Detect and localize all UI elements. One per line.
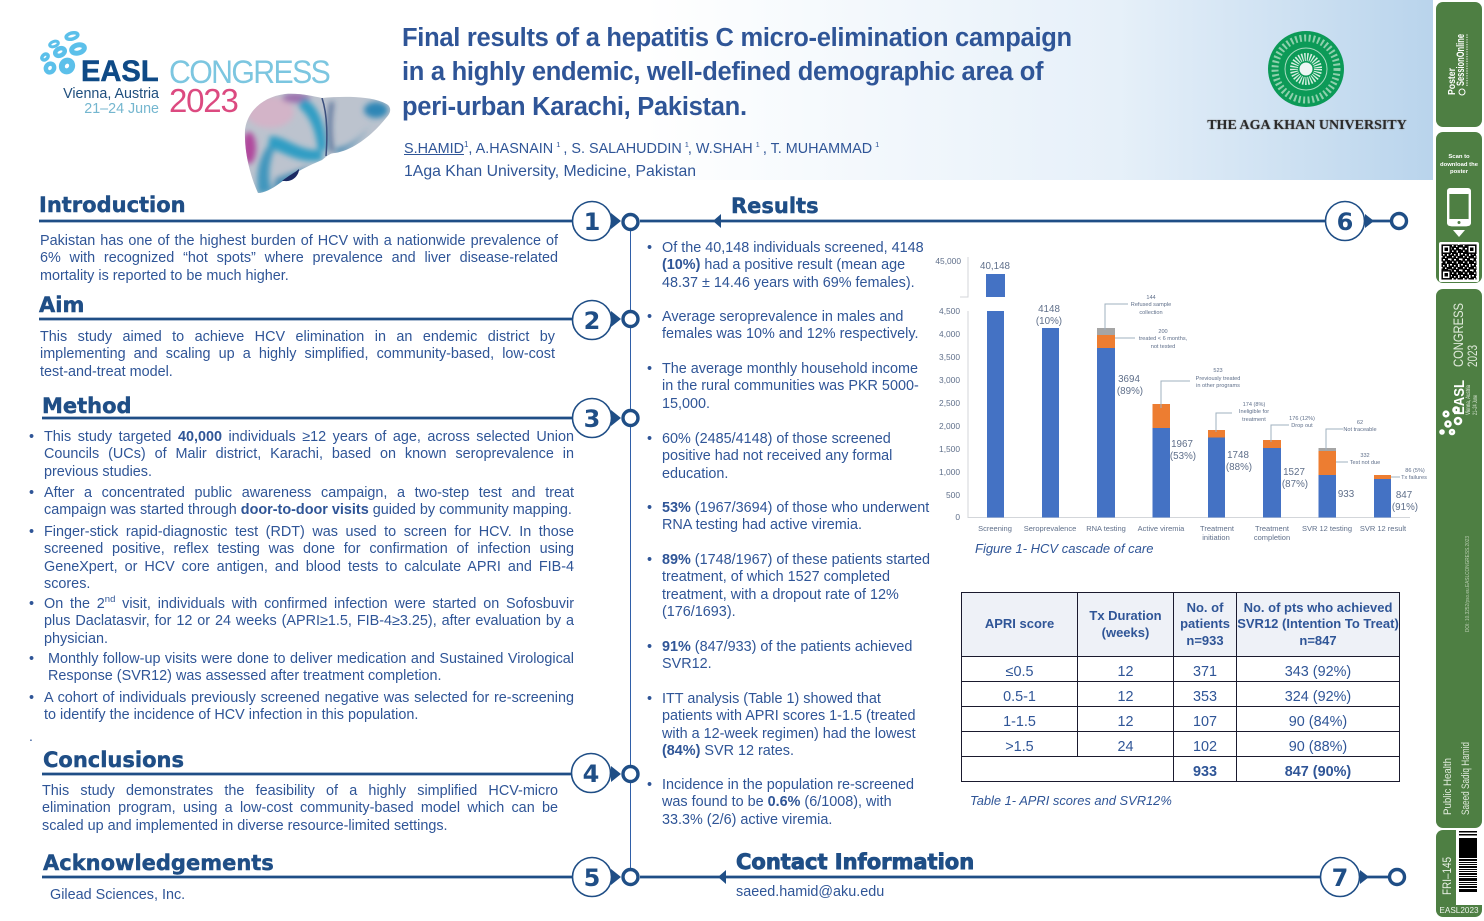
annotation labels: treatment: [1242, 417, 1266, 423]
table: APRI scores and SVR12: 371: [1193, 664, 1217, 680]
y axis labels: 500: [946, 490, 960, 500]
table: APRI scores and SVR12: (weeks): [1102, 624, 1149, 640]
text: conclusions: elimination program, using a low-cost community-based model which can be: [42, 800, 558, 816]
table: APRI scores and SVR12: 847 (90%): [1285, 764, 1351, 780]
bullet: ITT: ITT analysis (Table 1) showed that: [662, 691, 881, 707]
caption: figure 1: Figure 1- HCV cascade of care: [975, 541, 1153, 556]
table: APRI scores and SVR12: >1.5: [1005, 738, 1034, 754]
table: APRI scores and SVR12: 90 (84%): [1289, 714, 1347, 730]
bullet: education: 60% (2485/4148) of those screened: [662, 431, 891, 447]
text: Poster Session Online: SessionOnline: [1455, 34, 1467, 86]
icon: hexagon cells: [40, 31, 87, 75]
bullet: ITT: [662, 691, 916, 760]
category labels: Screening: [978, 524, 1012, 533]
badge 3 connector: 3: [584, 405, 600, 433]
bullet: RDT: Finger-stick rapid-diagnostic test (RDT) was used to screen for HCV. In those: [44, 524, 574, 540]
category labels: completion: [1254, 533, 1290, 542]
text: introduction: [40, 233, 558, 284]
bullet: SVR12: 91% (847/933) of the patients achieved: [662, 639, 912, 655]
table: APRI scores and SVR12: 353: [1193, 688, 1217, 704]
annotation labels: 86 (5%): [1405, 468, 1425, 474]
bullet: treatment: 89% (1748/1967) of these patients started: [662, 552, 930, 568]
value labels: 1748: [1227, 450, 1249, 461]
bullet: incidence: 33.3% (2/6) active viremia.: [662, 812, 832, 828]
table: APRI scores and SVR12: 12: [1117, 714, 1134, 730]
value labels: 847: [1396, 490, 1412, 501]
bullet: seroprevalence: [662, 309, 918, 344]
text: conclusions: This study demonstrates the feasibility of a highly simplified HCV-micro: [42, 783, 558, 799]
text: 2023: 2023: [169, 82, 238, 119]
text: conclusions: scaled up and implemented in diverse resource-limited settings.: [42, 818, 448, 834]
annotation labels: Ineligible for: [1239, 409, 1269, 415]
text: Poster Session Online: [1447, 34, 1468, 96]
table: APRI scores and SVR12: [961, 592, 1400, 782]
bullet: education: [662, 431, 892, 483]
text: scan caption: Scan to download the poster: [1440, 154, 1478, 175]
badge 7 connector: 7: [1332, 864, 1348, 892]
text: CONGRESS 2023 rotated: 2023: [1464, 345, 1480, 367]
category labels: SVR 12 testing: [1302, 524, 1352, 533]
category labels: SVR 12 result: [1360, 524, 1407, 533]
bullet: viremia: [662, 500, 929, 535]
annotation labels: Drop out: [1291, 423, 1313, 429]
bullet: screened: 48.37 ± 14.46 years with 69% females).: [662, 275, 915, 291]
table: APRI scores and SVR12: n=847: [1299, 633, 1337, 648]
text: CONGRESS 2023 rotated: DOI: 10.3252/pso.eu.EASLCONGRESS.2023: [1465, 536, 1471, 632]
title: peri-urban Karachi, Pakistan.: [402, 92, 747, 120]
annotation labels: Test not due: [1350, 460, 1380, 466]
bullet: second visit: plus Daclatasvir, for 12 or 24 weeks (APRI≥1.5, FIB-4≥3.25), after evaluation by a: [44, 613, 574, 629]
badge 5 connector: [42, 858, 1322, 896]
affiliation: 1Aga Khan University, Medicine, Pakistan: [404, 163, 696, 180]
text: aim: implementing and scaling up a highly simplified, community-based, low-cost: [40, 346, 555, 362]
bullet: screened: [662, 240, 924, 292]
title: in a highly endemic, well-defined demographic area of: [402, 58, 1043, 86]
bullet: follow-up: Response (SVR12) was assessed after treatment completion.: [48, 668, 442, 684]
table: APRI scores and SVR12: ≤0.5: [1006, 664, 1033, 680]
bullet: treatment: [662, 552, 930, 621]
category labels: [978, 524, 1407, 542]
table: APRI scores and SVR12: 324 (92%): [1285, 688, 1351, 704]
logo: EASL Congress 2023: [40, 31, 330, 119]
y axis labels: 4,500: [939, 306, 960, 316]
bullet: ITT: (84%) SVR 12 rates.: [662, 743, 794, 759]
bullet: cohort: to identify the incidence of HCV infection in this population.: [44, 707, 418, 723]
annotation labels: 200: [1158, 329, 1168, 335]
value labels: 40,148: [980, 261, 1011, 272]
heading: Method: Method: [42, 394, 132, 418]
bullet: income: in the rural communities was PKR 5000-: [662, 378, 919, 394]
text: CONGRESS 2023 rotated: Saeed Sadiq Hamid: [1460, 742, 1472, 815]
table: APRI scores and SVR12: 107: [1193, 714, 1217, 730]
y axis labels: 3,500: [939, 352, 960, 362]
text: contact email: saeed.hamid@aku.edu: [736, 884, 884, 900]
badge 2 connector: 2: [584, 307, 600, 335]
annotation labels: [1131, 295, 1427, 481]
bullet: income: [662, 361, 919, 413]
bullet: second visit: physician.: [44, 631, 108, 647]
bullet: treatment: treatment, of which 1527 completed: [662, 569, 890, 585]
heading: Acknowledgements: Acknowledgements: [43, 851, 274, 875]
stray dot: .: [29, 728, 33, 744]
category labels: initiation: [1202, 533, 1230, 542]
bullet: incidence: [662, 777, 914, 829]
annotation labels: 174 (8%): [1243, 402, 1265, 408]
value labels: 1967: [1171, 439, 1193, 450]
title: Final results of a hepatitis C micro-elimination campaign: [402, 24, 1072, 52]
bullet: treatment: (176/1693).: [662, 604, 736, 620]
y axis labels: 3,000: [939, 375, 960, 385]
text: Poster Session Online: Poster: [1447, 68, 1458, 95]
heading: Introduction: Introduction: [39, 193, 186, 217]
bullet: RDT: [44, 524, 574, 593]
heading: Aim: Aim: [39, 293, 84, 317]
bullet: RDT: GeneXpert, or HCV core antigen, and blood tests to calculate APRI and FIB-4: [44, 559, 574, 575]
category labels: Active viremia: [1138, 524, 1185, 533]
table: APRI scores and SVR12: patients: [1180, 616, 1230, 631]
annotation labels: Not traceable: [1343, 427, 1377, 433]
badge 1 connector: 1: [584, 208, 600, 236]
annotation labels: 62: [1357, 420, 1363, 426]
bullet: seroprevalence: females was 10% and 12% respectively.: [662, 326, 918, 342]
annotation labels: 523: [1213, 368, 1223, 374]
category labels: Treatment: [1255, 524, 1290, 533]
text: FRI-145: FRI–145: [1440, 857, 1454, 895]
bullet: education: positive had not received any formal: [662, 448, 892, 464]
table: APRI scores and SVR12: 12: [1117, 664, 1134, 680]
text: Vienna, Austria: Vienna, Austria: [63, 86, 159, 102]
table: APRI scores and SVR12: 12: [1117, 688, 1134, 704]
text: CONGRESS 2023 rotated: EASL: [1452, 380, 1468, 415]
list: method: [29, 429, 574, 723]
authors: S.HAMID1, A.HASNAIN 1 , S. SALAHUDDIN 1, W.SHAH 1 , T. MUHAMMAD 1: [404, 140, 879, 157]
bullet: screened: Of the 40,148 individuals screened, 4148: [662, 240, 924, 256]
text: EASL: EASL: [81, 55, 159, 88]
heading: Contact Information: Contact Information: [736, 850, 974, 874]
sidebar panel: congress details: [1436, 289, 1482, 828]
text: introduction: mortality is reported to be much higher.: [40, 268, 289, 284]
icon: university seal: [1268, 31, 1344, 107]
text: EASL2023: EASL2023: [1439, 906, 1479, 915]
table: APRI scores and SVR12: 102: [1193, 738, 1217, 754]
bullet: income: The average monthly household income: [662, 361, 918, 377]
annotation labels: 176 (12%): [1289, 416, 1315, 422]
bullet: income: 15,000.: [662, 396, 710, 412]
list: method: •: [29, 651, 34, 667]
annotation labels: 144: [1146, 295, 1156, 301]
annotation labels: 332: [1360, 453, 1370, 459]
bullet: second visit: [44, 596, 574, 648]
bullet: target: Councils (UCs) of Malir district, Karachi, based on known seroprevalence in: [44, 446, 574, 462]
text: CONGRESS 2023 rotated: CONGRESS: [1450, 303, 1466, 367]
text: aim: test-and-treat model.: [40, 364, 173, 380]
table: APRI scores and SVR12: APRI score: [985, 616, 1054, 631]
leader lines: [1105, 304, 1400, 477]
value labels: 4148: [1038, 304, 1060, 315]
annotation labels: Tx failures: [1401, 475, 1427, 481]
badge 6 connector: 6: [1337, 208, 1353, 236]
table: APRI scores and SVR12: No. of pts who achieved: [1244, 600, 1392, 615]
text: introduction: 6% with recognized “hot spots” where prevalence and liver disease-related: [40, 250, 558, 266]
value labels: (91%): [1392, 502, 1418, 513]
icon: liver illustration: [244, 94, 390, 193]
category labels: Seroprevalence: [1024, 524, 1076, 533]
table: APRI scores and SVR12: 933: [1193, 764, 1217, 780]
text: conclusions: [42, 783, 558, 834]
value labels: (87%): [1282, 479, 1308, 490]
y axis labels: 2,500: [939, 398, 960, 408]
title: [402, 24, 1072, 120]
text: CONGRESS 2023 rotated: [1439, 303, 1480, 815]
bars: orange: [1097, 335, 1391, 479]
y axis labels: 2,000: [939, 421, 960, 431]
badge 1 connector: [39, 202, 1326, 240]
bullet: seroprevalence: Average seroprevalence in males and: [662, 309, 903, 325]
bullet: follow-up: Monthly follow-up visits were done to deliver medication and Sustained Virological: [48, 651, 574, 667]
badge 4 connector: 4: [583, 760, 599, 788]
annotation labels: Refused sample: [1131, 302, 1171, 308]
annotation labels: Previously treated: [1196, 376, 1240, 382]
bullet: follow-up: [48, 651, 574, 686]
table: APRI scores and SVR12: 1-1.5: [1003, 714, 1036, 730]
bullet: campaign: After a concentrated public awareness campaign, a two-step test and treat: [44, 485, 574, 501]
badge 3 connector: [42, 398, 638, 438]
table: APRI scores and SVR12: 24: [1117, 738, 1134, 754]
bullet: campaign: [44, 485, 574, 520]
text: introduction: Pakistan has one of the highest burden of HCV with a nationwide prevalence of: [40, 233, 558, 249]
bullet: cohort: [44, 690, 574, 725]
category labels: RNA testing: [1086, 524, 1126, 533]
table: APRI scores and SVR12: 90 (88%): [1289, 738, 1347, 754]
bullet: target: [44, 429, 574, 481]
logo: Aga Khan University: [1206, 31, 1407, 132]
value labels: (53%): [1170, 451, 1196, 462]
annotation labels: in other programs: [1196, 383, 1240, 389]
bullet: target: This study targeted 40,000 individuals ≥12 years of age, across selected Union: [44, 429, 574, 445]
annotation labels: treated < 6 months,: [1139, 336, 1188, 342]
sidebar panel: barcode: [1436, 830, 1482, 917]
badge 4 connector: [42, 754, 638, 792]
badge 2 connector: [39, 300, 638, 340]
value labels: (88%): [1226, 462, 1252, 473]
bullet: incidence: was found to be 0.6% (6/1008), with: [662, 794, 892, 810]
bullet: treatment: treatment, with a dropout rate of 12%: [662, 587, 899, 603]
badge 5 connector: 5: [584, 864, 600, 892]
text: aim: [40, 329, 555, 380]
bullet: ITT: with a 12-week regimen) had the lowest: [662, 726, 916, 742]
icon: phone: [1447, 188, 1471, 237]
y axis labels: 45,000: [935, 256, 961, 266]
annotation labels: collection: [1139, 310, 1163, 316]
y axis labels: [935, 256, 961, 522]
text: acknowledgements: Gilead Sciences, Inc.: [50, 887, 185, 903]
bullet: RDT: screened positive, reflex testing was done for confirmation of infection using: [44, 541, 574, 557]
bullet: campaign: campaign was started through door-to-door visits guided by community mapping.: [44, 502, 572, 518]
header gradient band: [0, 0, 1433, 180]
text: CONGRESS 2023 rotated: 21–24 June: [1473, 395, 1479, 415]
annotation labels: not tested: [1151, 344, 1175, 350]
table: APRI scores and SVR12: No. of: [1187, 600, 1223, 615]
text: 21-24 June: 21–24 June: [84, 101, 159, 117]
bullet: SVR12: [662, 639, 912, 674]
value labels: 933: [1338, 489, 1355, 500]
chart: HCV cascade of care: [935, 256, 1427, 542]
bullet: second visit: On the 2nd visit, individuals with confirmed infection were started on Sofosbuvir: [44, 594, 574, 612]
bullet: viremia: 53% (1967/3694) of those who underwent: [662, 500, 929, 516]
bullet: screened: (10%) had a positive result (mean age: [662, 257, 905, 273]
category labels: Treatment: [1200, 524, 1235, 533]
bullet: cohort: A cohort of individuals previously screened negative was selected for re-screening: [44, 690, 574, 706]
bullet: target: previous studies.: [44, 464, 152, 480]
table: APRI scores and SVR12: SVR12 (Intention To Treat): [1237, 616, 1399, 631]
bars: blue: [986, 274, 1391, 518]
axes: [960, 257, 1410, 518]
bullet: viremia: RNA testing had active viremia.: [662, 517, 862, 533]
bullet: education: education.: [662, 466, 728, 482]
text: CONGRESS 2023 rotated: Public Health: [1442, 758, 1454, 815]
value labels: (10%): [1036, 316, 1062, 327]
text: aim: This study aimed to achieve HCV elimination in an endemic district by: [40, 329, 555, 345]
bullet: ITT: patients with APRI scores 1-1.5 (treated: [662, 708, 916, 724]
table: APRI scores and SVR12: 0.5-1: [1003, 688, 1036, 704]
value labels: 1527: [1283, 467, 1305, 478]
text: university name: THE AGA KHAN UNIVERSITY: [1207, 118, 1407, 132]
badge 7 connector: [1320, 858, 1404, 896]
y axis labels: 4,000: [939, 329, 960, 339]
heading: Conclusions: Conclusions: [43, 748, 184, 772]
bars: grey: [1097, 328, 1336, 451]
y axis labels: 1,500: [939, 444, 960, 454]
badge 6 connector: [1326, 202, 1406, 240]
table: APRI scores and SVR12: n=933: [1186, 633, 1224, 648]
heading: Results: Results: [731, 194, 819, 218]
bullet: SVR12: SVR12.: [662, 656, 712, 672]
caption: table 1: Table 1- APRI scores and SVR12%: [970, 793, 1172, 808]
y axis labels: 0: [955, 512, 960, 522]
value labels: 3694: [1118, 374, 1140, 385]
sidebar panel: Poster Session Online: [1436, 2, 1482, 127]
text: CONGRESS: CONGRESS: [169, 54, 329, 90]
bullet: incidence: Incidence in the population re-screened: [662, 777, 914, 793]
value labels: [980, 261, 1418, 513]
bullet: RDT: scores.: [44, 576, 90, 592]
value labels: (89%): [1117, 386, 1143, 397]
icon: QR code: [1439, 242, 1479, 282]
list: results: [648, 240, 930, 828]
sidebar panel: scan to download: [1436, 132, 1482, 283]
table: APRI scores and SVR12: Tx Duration: [1089, 608, 1162, 623]
barcode: [1456, 830, 1482, 905]
table: APRI scores and SVR12: 343 (92%): [1285, 664, 1351, 680]
y axis labels: 1,000: [939, 467, 960, 477]
text: CONGRESS 2023 rotated: Vienna, Austria: [1466, 385, 1472, 415]
